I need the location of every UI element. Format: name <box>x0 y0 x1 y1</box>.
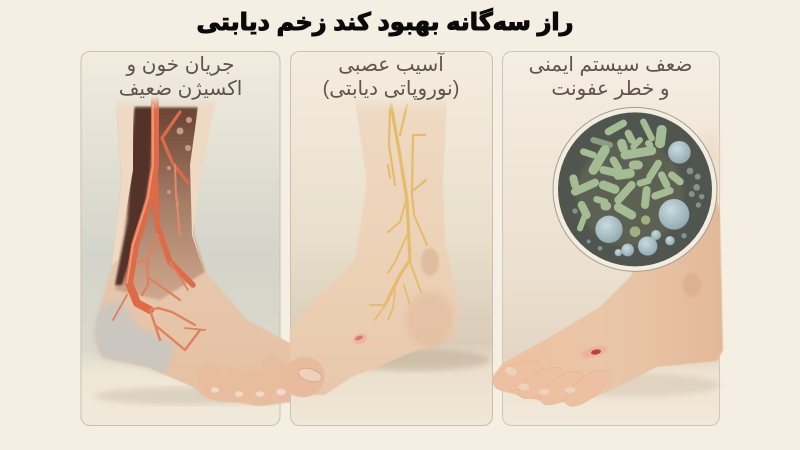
label: nerve damage <box>323 52 459 100</box>
label: blood flow: جریان خون و <box>127 54 234 76</box>
spores <box>595 141 691 256</box>
panel: weak immunity and infection <box>489 52 723 426</box>
big toe of first foot <box>276 349 332 405</box>
foot with arteries <box>95 96 306 409</box>
arteries <box>113 100 205 350</box>
toes <box>191 350 306 409</box>
label: immunity: و خطر عفونت <box>551 78 670 100</box>
panel: nerve damage <box>290 52 492 426</box>
label: blood flow <box>119 54 242 100</box>
bacteria rods <box>573 122 680 228</box>
label: immunity <box>529 54 692 100</box>
label: blood flow: اکسیژن ضعیف <box>119 78 242 100</box>
label: immunity: ضعف سیستم ایمنی <box>529 54 692 76</box>
panel: poor blood flow <box>81 52 306 426</box>
label: nerve damage: آسیب عصبی <box>338 54 444 76</box>
foot with nerves <box>290 96 490 395</box>
magnified bacteria circle <box>553 107 717 271</box>
foot with wound <box>489 120 723 413</box>
label: nerve damage: (نوروپاتی دیابتی) <box>323 78 459 100</box>
title: راز سه‌گانه بهبود کند زخم دیابتی <box>197 9 573 36</box>
